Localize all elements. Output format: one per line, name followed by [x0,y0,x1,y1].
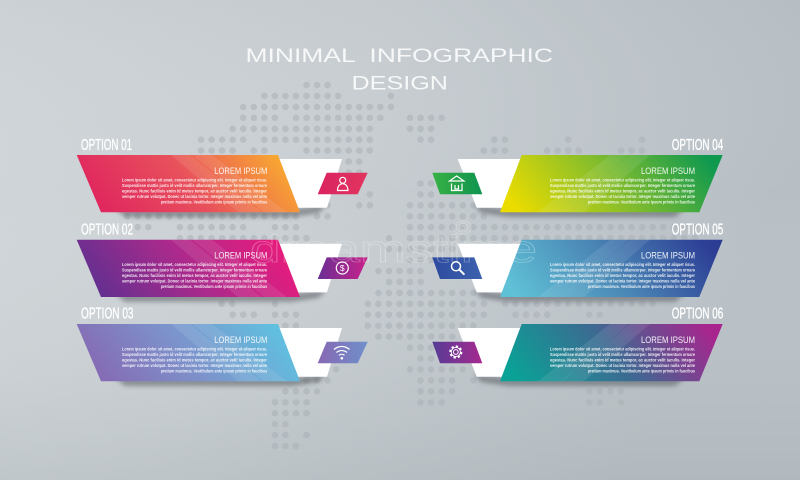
text block 06: Lorem ipsum dolor sit amet, consectetur adipiscing elit. Integer et aliquet risus. [550,346,695,352]
text block 02: semper rutrum volutpat. Donec ut lacinia tortor. Integer maximus nulla vel ante [122,279,267,284]
option label 04: OPTION 04 [672,137,723,154]
option label 01: OPTION 01 [81,137,132,154]
panel: option 05 [432,221,723,302]
text block 03: Lorem ipsum dolor sit amet, consectetur adipiscing elit. Integer et aliquet risus. [122,346,267,352]
text block 02 [122,251,268,289]
text block 01: Lorem ipsum dolor sit amet, consectetur adipiscing elit. Integer et aliquet risus. [122,178,267,182]
text block 01: Suspendisse mattis justo id velit mollis ullamcorper. Integer fermentum ornare [122,183,267,188]
text block 02: Suspendisse mattis justo id velit mollis ullamcorper. Integer fermentum ornare [122,268,267,273]
text block 04: Suspendisse mattis justo id velit mollis ullamcorper. Integer fermentum ornare [550,183,695,188]
text block 02: egestas. Nunc facilisis enim id metus tempor, ac auctor velit iaculis. Integer [122,273,267,278]
text block 04 [550,166,695,204]
option label 03: OPTION 03 [81,305,134,322]
text block 06: pretium maximus. Vestibulum ante ipsum primis in faucibus [588,368,695,374]
title: MINIMAL INFOGRAPHIC [246,46,553,67]
text block 05: semper rutrum volutpat. Donec ut lacinia tortor. Integer maximus nulla vel ante [550,279,695,284]
watermark [250,221,537,271]
text block 05: LOREM IPSUM [641,251,695,262]
text block 03: semper rutrum volutpat. Donec ut lacinia tortor. Integer maximus nulla vel ante [122,363,267,368]
dotted world map [127,85,701,446]
text block 01 [122,166,268,204]
option label 05: OPTION 05 [672,221,723,238]
text block 04: pretium maximus. Vestibulum ante ipsum primis in faucibus [588,200,695,204]
banner 05 [500,240,723,297]
text block 01: semper rutrum volutpat. Donec ut lacinia tortor. Integer maximus nulla vel ante [122,194,267,199]
text block 03: LOREM IPSUM [214,335,267,346]
text block 03: egestas. Nunc facilisis enim id metus tempor, ac auctor velit iaculis. Integer [122,358,267,362]
tag with icon: house [432,173,482,194]
tag with icon: magnifier [432,257,482,279]
banner 06 [500,324,723,381]
text block 06: semper rutrum volutpat. Donec ut lacinia tortor. Integer maximus nulla vel ante [550,363,695,368]
banner 01 [77,155,300,212]
banner 04 [500,155,723,212]
panel: option 04 [432,137,723,217]
tag with icon: wifi [318,342,368,363]
text block 05: Suspendisse mattis justo id velit mollis ullamcorper. Integer fermentum ornare [550,268,695,273]
option label 02: OPTION 02 [81,221,133,238]
text block 01: egestas. Nunc facilisis enim id metus tempor, ac auctor velit iaculis. Integer [122,188,267,194]
text block 06: Suspendisse mattis justo id velit mollis ullamcorper. Integer fermentum ornare [550,352,695,357]
panel: option 01 [77,137,368,217]
text block 01: LOREM IPSUM [214,166,267,177]
tag with icon: person [318,173,368,194]
text block 02: pretium maximus. Vestibulum ante ipsum primis in faucibus [161,284,268,289]
text block 06 [550,335,695,374]
banner 02 [77,240,300,297]
text block 03: pretium maximus. Vestibulum ante ipsum primis in faucibus [161,368,268,374]
title: DESIGN [352,73,448,94]
option label 06: OPTION 06 [672,305,723,322]
text block 04: semper rutrum volutpat. Donec ut lacinia tortor. Integer maximus nulla vel ante [550,194,695,199]
text block 05: pretium maximus. Vestibulum ante ipsum primis in faucibus [588,284,695,289]
text block 02: Lorem ipsum dolor sit amet, consectetur adipiscing elit. Integer et aliquet risus. [122,262,267,267]
text block 06: LOREM IPSUM [641,335,695,346]
text block 04: Lorem ipsum dolor sit amet, consectetur adipiscing elit. Integer et aliquet risus. [550,178,695,182]
text block 05 [550,251,695,289]
text block 04: LOREM IPSUM [641,166,695,177]
panel: option 03 [77,305,368,386]
panel: option 02 [77,221,368,302]
text block 05: Lorem ipsum dolor sit amet, consectetur adipiscing elit. Integer et aliquet risus. [550,262,695,267]
text block 04: egestas. Nunc facilisis enim id metus tempor, ac auctor velit iaculis. Integer [550,188,695,194]
banner 03 [77,324,300,381]
text block 03 [122,335,268,374]
tag with icon: dollar: $ [340,263,345,273]
text block 06: egestas. Nunc facilisis enim id metus tempor, ac auctor velit iaculis. Integer [550,358,695,362]
text block 05: egestas. Nunc facilisis enim id metus tempor, ac auctor velit iaculis. Integer [550,273,695,278]
title [246,46,553,94]
panel: option 06 [432,305,723,386]
tag with icon: dollar [318,257,368,279]
watermark: dreamstime [250,229,537,271]
text block 03: Suspendisse mattis justo id velit mollis ullamcorper. Integer fermentum ornare [122,352,267,357]
text block 02: LOREM IPSUM [214,251,267,262]
tag with icon: gear [432,342,482,363]
text block 01: pretium maximus. Vestibulum ante ipsum primis in faucibus [161,200,268,204]
